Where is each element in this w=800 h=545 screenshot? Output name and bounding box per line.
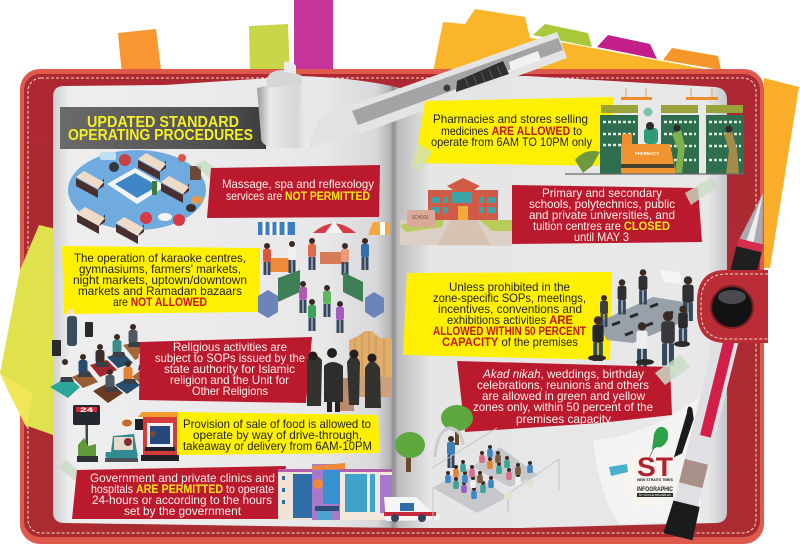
- panel: food sale: [178, 412, 380, 455]
- market illustration: [258, 221, 390, 333]
- panel: weddings and gatherings: zones only, within 50 percent of the: [473, 400, 653, 414]
- panel: meetings: CAPACITY of the premises: [442, 335, 578, 349]
- panel: food sale: Provision of sale of food is allowed to: [183, 417, 371, 431]
- panel: schools: until MAY 3: [574, 230, 629, 244]
- panel: food sale: operate by way of drive-through,: [193, 428, 362, 442]
- utility knife: [308, 32, 567, 147]
- wedding illustration: [395, 405, 559, 520]
- panel: meetings: Unless prohibited in the: [449, 280, 570, 294]
- panel: meetings: zone-specific SOPs, meetings,: [433, 291, 586, 305]
- branding badge: [622, 452, 676, 507]
- title bar: OPERATING PROCEDURES: [68, 127, 253, 144]
- panel: religious activities: subject to SOPs issued by the: [155, 351, 305, 365]
- pen: [656, 187, 778, 540]
- panel: massage and spa: Massage, spa and reflexology: [222, 177, 374, 191]
- panel: schools: Primary and secondary: [542, 186, 662, 200]
- school illustration: SCHOOL: [412, 215, 429, 221]
- branding badge: ST: [637, 452, 674, 482]
- spa illustration: [68, 150, 206, 244]
- panel: food sale: takeaway or delivery from 6AM-10PM: [183, 439, 372, 453]
- panel: massage and spa: services are NOT PERMITTED: [226, 189, 370, 203]
- panel: weddings and gatherings: [457, 361, 672, 432]
- panel: weddings and gatherings: are allowed in green and yellow: [482, 389, 645, 403]
- panel: pharmacies: operate from 6AM TO 10PM only: [431, 135, 592, 149]
- panel: karaoke and markets: The operation of karaoke centres,: [74, 251, 246, 265]
- schools tape: [685, 177, 717, 205]
- title bar: [60, 107, 266, 149]
- title bar: UPDATED STANDARD: [87, 114, 239, 131]
- blue tape: [609, 464, 628, 476]
- panel: weddings and gatherings: premises capacity: [516, 412, 611, 426]
- imam and speakers: [52, 309, 93, 356]
- panel: meetings: exhibitions activities ARE: [447, 313, 573, 327]
- panel: religious activities: [139, 337, 312, 403]
- panel: clinics and hospitals: hospitals ARE PERMITTED to operate: [91, 482, 274, 496]
- panel: meetings: [403, 272, 612, 360]
- pharmacy tape: [410, 143, 432, 172]
- clinics tape: [58, 460, 90, 488]
- panel: religious activities: Religious activities are: [173, 340, 287, 354]
- panel: religious activities: state authority for Islamic: [164, 362, 295, 376]
- sticky note: yellow, left: [0, 225, 60, 437]
- panel: clinics and hospitals: set by the government: [124, 504, 242, 518]
- panel: weddings and gatherings: Akad nikah, weddings, birthday: [482, 367, 644, 381]
- drive-through illustration: 24: [80, 408, 94, 414]
- weddings tape: [655, 355, 690, 385]
- panel: schools: schools, polytechnics, public: [529, 197, 675, 211]
- strap with snap button: [697, 270, 768, 343]
- panel: karaoke and markets: gymnasiums, farmers' markets,: [79, 262, 241, 276]
- pharmacy illustration: PHARMACY: [635, 151, 659, 156]
- hospital illustration: [278, 463, 392, 520]
- school illustration: [400, 178, 512, 246]
- panel: pharmacies: medicines ARE ALLOWED to: [441, 124, 582, 138]
- folder tabs behind the notebook: [433, 9, 799, 268]
- panel: schools: [512, 185, 702, 244]
- panel: karaoke and markets: night markets, uptown/downtown: [73, 273, 247, 287]
- sticky index tabs: [118, 0, 333, 86]
- panel: religious activities: religion and the Unit for: [170, 373, 289, 387]
- panel: clinics and hospitals: [72, 466, 286, 519]
- ambulance: [384, 497, 440, 522]
- spa tape: [195, 160, 224, 183]
- panel: schools: and private universities, and: [529, 208, 675, 222]
- panel: clinics and hospitals: Government and private clinics and: [90, 471, 275, 485]
- panel: weddings and gatherings: celebrations, reunions and others: [477, 378, 649, 392]
- icon: green push pin: [649, 427, 668, 458]
- branding badge: NEW STRAITS TIMES: [637, 478, 673, 482]
- panel: meetings: ALLOWED WITHIN 50 PERCENT: [433, 324, 587, 338]
- panel: pharmacies: [415, 97, 613, 166]
- panel: karaoke and markets: markets and Ramadan bazaars: [78, 284, 242, 298]
- branding badge: INFOGRAPHIC: [637, 486, 673, 493]
- page curl bottom right: [593, 393, 705, 524]
- panel: karaoke and markets: are NOT ALLOWED: [113, 295, 207, 309]
- drive-through illustration: [73, 405, 179, 462]
- panel: karaoke and markets: [62, 246, 260, 314]
- branding badge: BY ROSLIE BRAMBLES: [639, 493, 671, 497]
- panel: schools: tuition centres are CLOSED: [533, 219, 670, 233]
- panel: clinics and hospitals: 24-hours or according to the hours: [92, 493, 272, 507]
- pharmacy illustration: [565, 88, 745, 174]
- page roll: [257, 62, 310, 148]
- panel: massage and spa: [207, 165, 380, 218]
- church organ and clergy: [307, 331, 392, 412]
- open notebook pages: [53, 76, 727, 528]
- worshippers on prayer mats: [50, 324, 156, 403]
- panel: pharmacies: Pharmacies and stores selling: [433, 112, 588, 126]
- meeting illustration: [588, 269, 694, 367]
- panel: meetings: incentives, conventions and: [438, 302, 582, 316]
- panel: religious activities: Other Religions: [192, 384, 268, 398]
